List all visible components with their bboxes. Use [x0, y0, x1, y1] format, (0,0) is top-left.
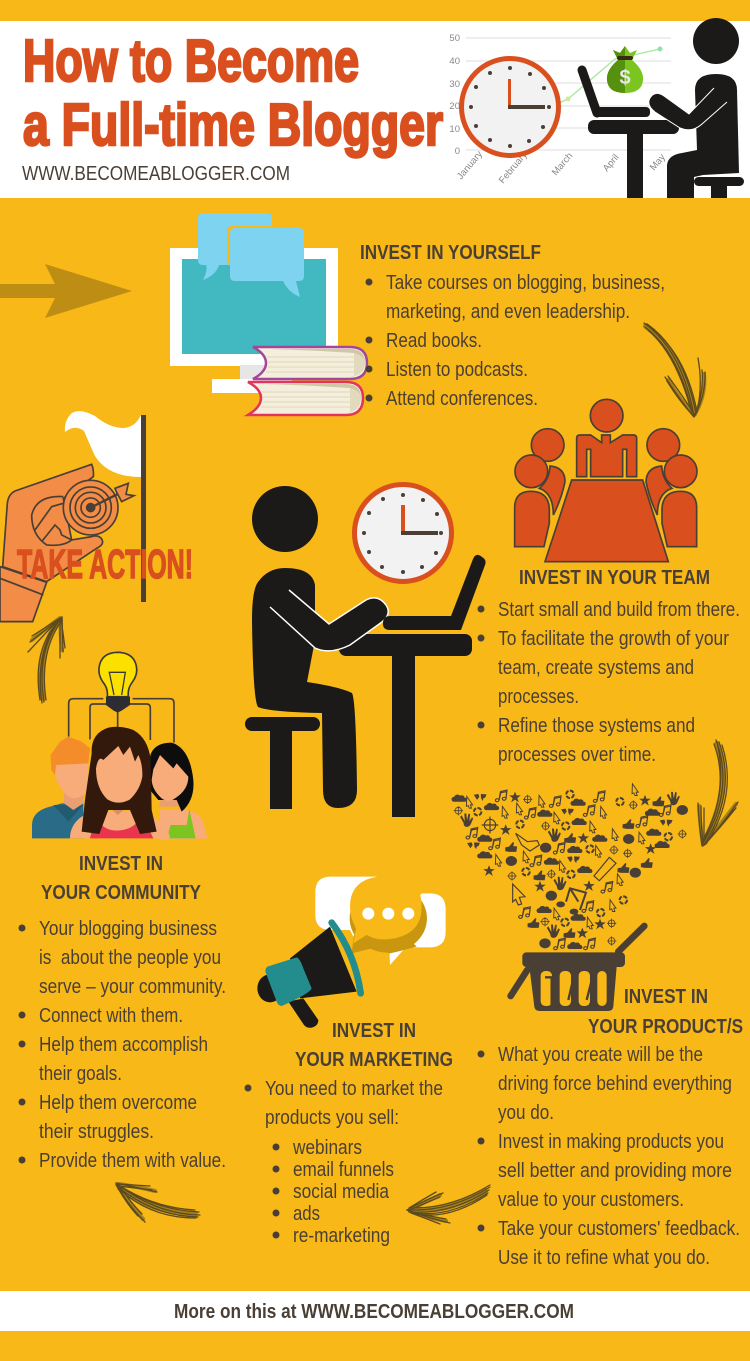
icon: community with lightbulb [32, 652, 208, 840]
section: invest in your marketing: webinars [292, 1136, 362, 1159]
section: invest in your marketing: email funnels [293, 1158, 394, 1181]
line chart: 10 [449, 124, 460, 135]
section: invest in yourself: Attend conferences. [386, 387, 538, 410]
icon: money bag [607, 46, 643, 93]
section: invest in yourself [360, 242, 665, 410]
header band [0, 18, 750, 198]
section: invest in your marketing: social media [293, 1180, 389, 1203]
icon: team meeting table [515, 399, 697, 562]
section: invest in yourself: Listen to podcasts. [386, 358, 528, 381]
website url: WWW.BECOMEABLOGGER.COM [22, 162, 290, 185]
line chart: March [550, 151, 575, 178]
section: invest in yourself: Read books. [386, 329, 482, 352]
section: invest in your marketing: YOUR MARKETING [295, 1049, 453, 1071]
section: invest in your marketing: products you sell: [265, 1106, 399, 1129]
section: invest in your community: Provide them with value. [39, 1149, 226, 1172]
line chart: 0 [455, 146, 460, 157]
line chart [449, 33, 671, 186]
section: invest in your team: team, create systems and [498, 656, 694, 679]
icon: central clock [354, 484, 452, 582]
icon: central blogger at desk [245, 486, 486, 817]
section: invest in your product: INVEST IN [624, 986, 708, 1008]
arrow: start pointer [0, 264, 132, 318]
section: invest in your community [18, 853, 226, 1172]
section: invest in your team [478, 567, 740, 766]
icon: money bag: $ [619, 67, 631, 89]
section: invest in yourself: Take courses on blogging, business, [386, 271, 665, 294]
section: invest in your community: YOUR COMMUNITY [41, 882, 202, 904]
icon: monitor with speech bubbles and books [170, 213, 367, 415]
heading: take action: TAKE ACTION! [17, 541, 193, 587]
section: invest in your team: processes over time. [498, 743, 656, 766]
section: invest in your product: Use it to refine what you do. [498, 1246, 710, 1269]
icon: header blogger at desk [582, 18, 744, 198]
footer band: More on this at WWW.BECOMEABLOGGER.COM [174, 1301, 574, 1323]
section: invest in your community: their goals. [39, 1062, 122, 1085]
section: invest in your community: Help them overcome [39, 1091, 197, 1114]
section: invest in your marketing: ads [293, 1202, 320, 1225]
arrow: brush arrow to community [116, 1183, 200, 1222]
section: invest in your team: INVEST IN YOUR TEAM [519, 567, 710, 589]
line chart: 50 [449, 33, 460, 44]
section: invest in your community: serve – your community. [39, 975, 226, 998]
section: invest in your marketing: re-marketing [293, 1224, 390, 1247]
icon: megaphone and speech bubbles [257, 876, 446, 1028]
section: invest in your community: Connect with them. [39, 1004, 183, 1027]
title: a Full-time Blogger [23, 92, 443, 158]
icon: header clock [462, 58, 558, 156]
section: invest in your community: their struggles. [39, 1120, 154, 1143]
section: invest in your team: Refine those systems and [498, 714, 695, 737]
section: invest in your product: What you create will be the [498, 1043, 703, 1066]
section: invest in your product: you do. [498, 1101, 554, 1124]
icon: flag and target in hand [0, 411, 146, 622]
icon: basket [511, 926, 644, 1011]
section: invest in yourself: marketing, and even leadership. [386, 300, 630, 323]
section: invest in your community: is about the people you [39, 946, 221, 969]
line chart: 40 [449, 56, 460, 67]
section: invest in yourself: INVEST IN YOURSELF [360, 242, 541, 264]
line chart: April [601, 152, 622, 174]
line chart: May [648, 152, 668, 173]
line chart: 20 [449, 101, 460, 112]
line chart: February [497, 150, 530, 186]
arrow: brush arrow to take action [28, 617, 65, 703]
section: invest in your product: value to your customers. [498, 1188, 684, 1211]
arrow: brush arrow to marketing [407, 1185, 490, 1224]
line chart: 30 [449, 79, 460, 90]
section: invest in your marketing [244, 1020, 453, 1247]
footer band [0, 1291, 750, 1331]
section: invest in your marketing: INVEST IN [332, 1020, 416, 1042]
section: invest in your team: processes. [498, 685, 579, 708]
section: invest in your community: Your blogging business [39, 917, 217, 940]
title: How to Become [23, 28, 359, 94]
section: invest in your community: Help them accomplish [39, 1033, 208, 1056]
icon: funnel of small symbols [452, 784, 688, 950]
arrow: brush arrow to team [644, 323, 705, 417]
arrow: brush arrow to product [698, 740, 738, 846]
section: invest in your marketing: You need to market the [265, 1077, 443, 1100]
title [23, 28, 443, 158]
section: invest in your product [478, 986, 743, 1269]
section: invest in your community: INVEST IN [79, 853, 163, 875]
line chart: January [455, 149, 485, 182]
